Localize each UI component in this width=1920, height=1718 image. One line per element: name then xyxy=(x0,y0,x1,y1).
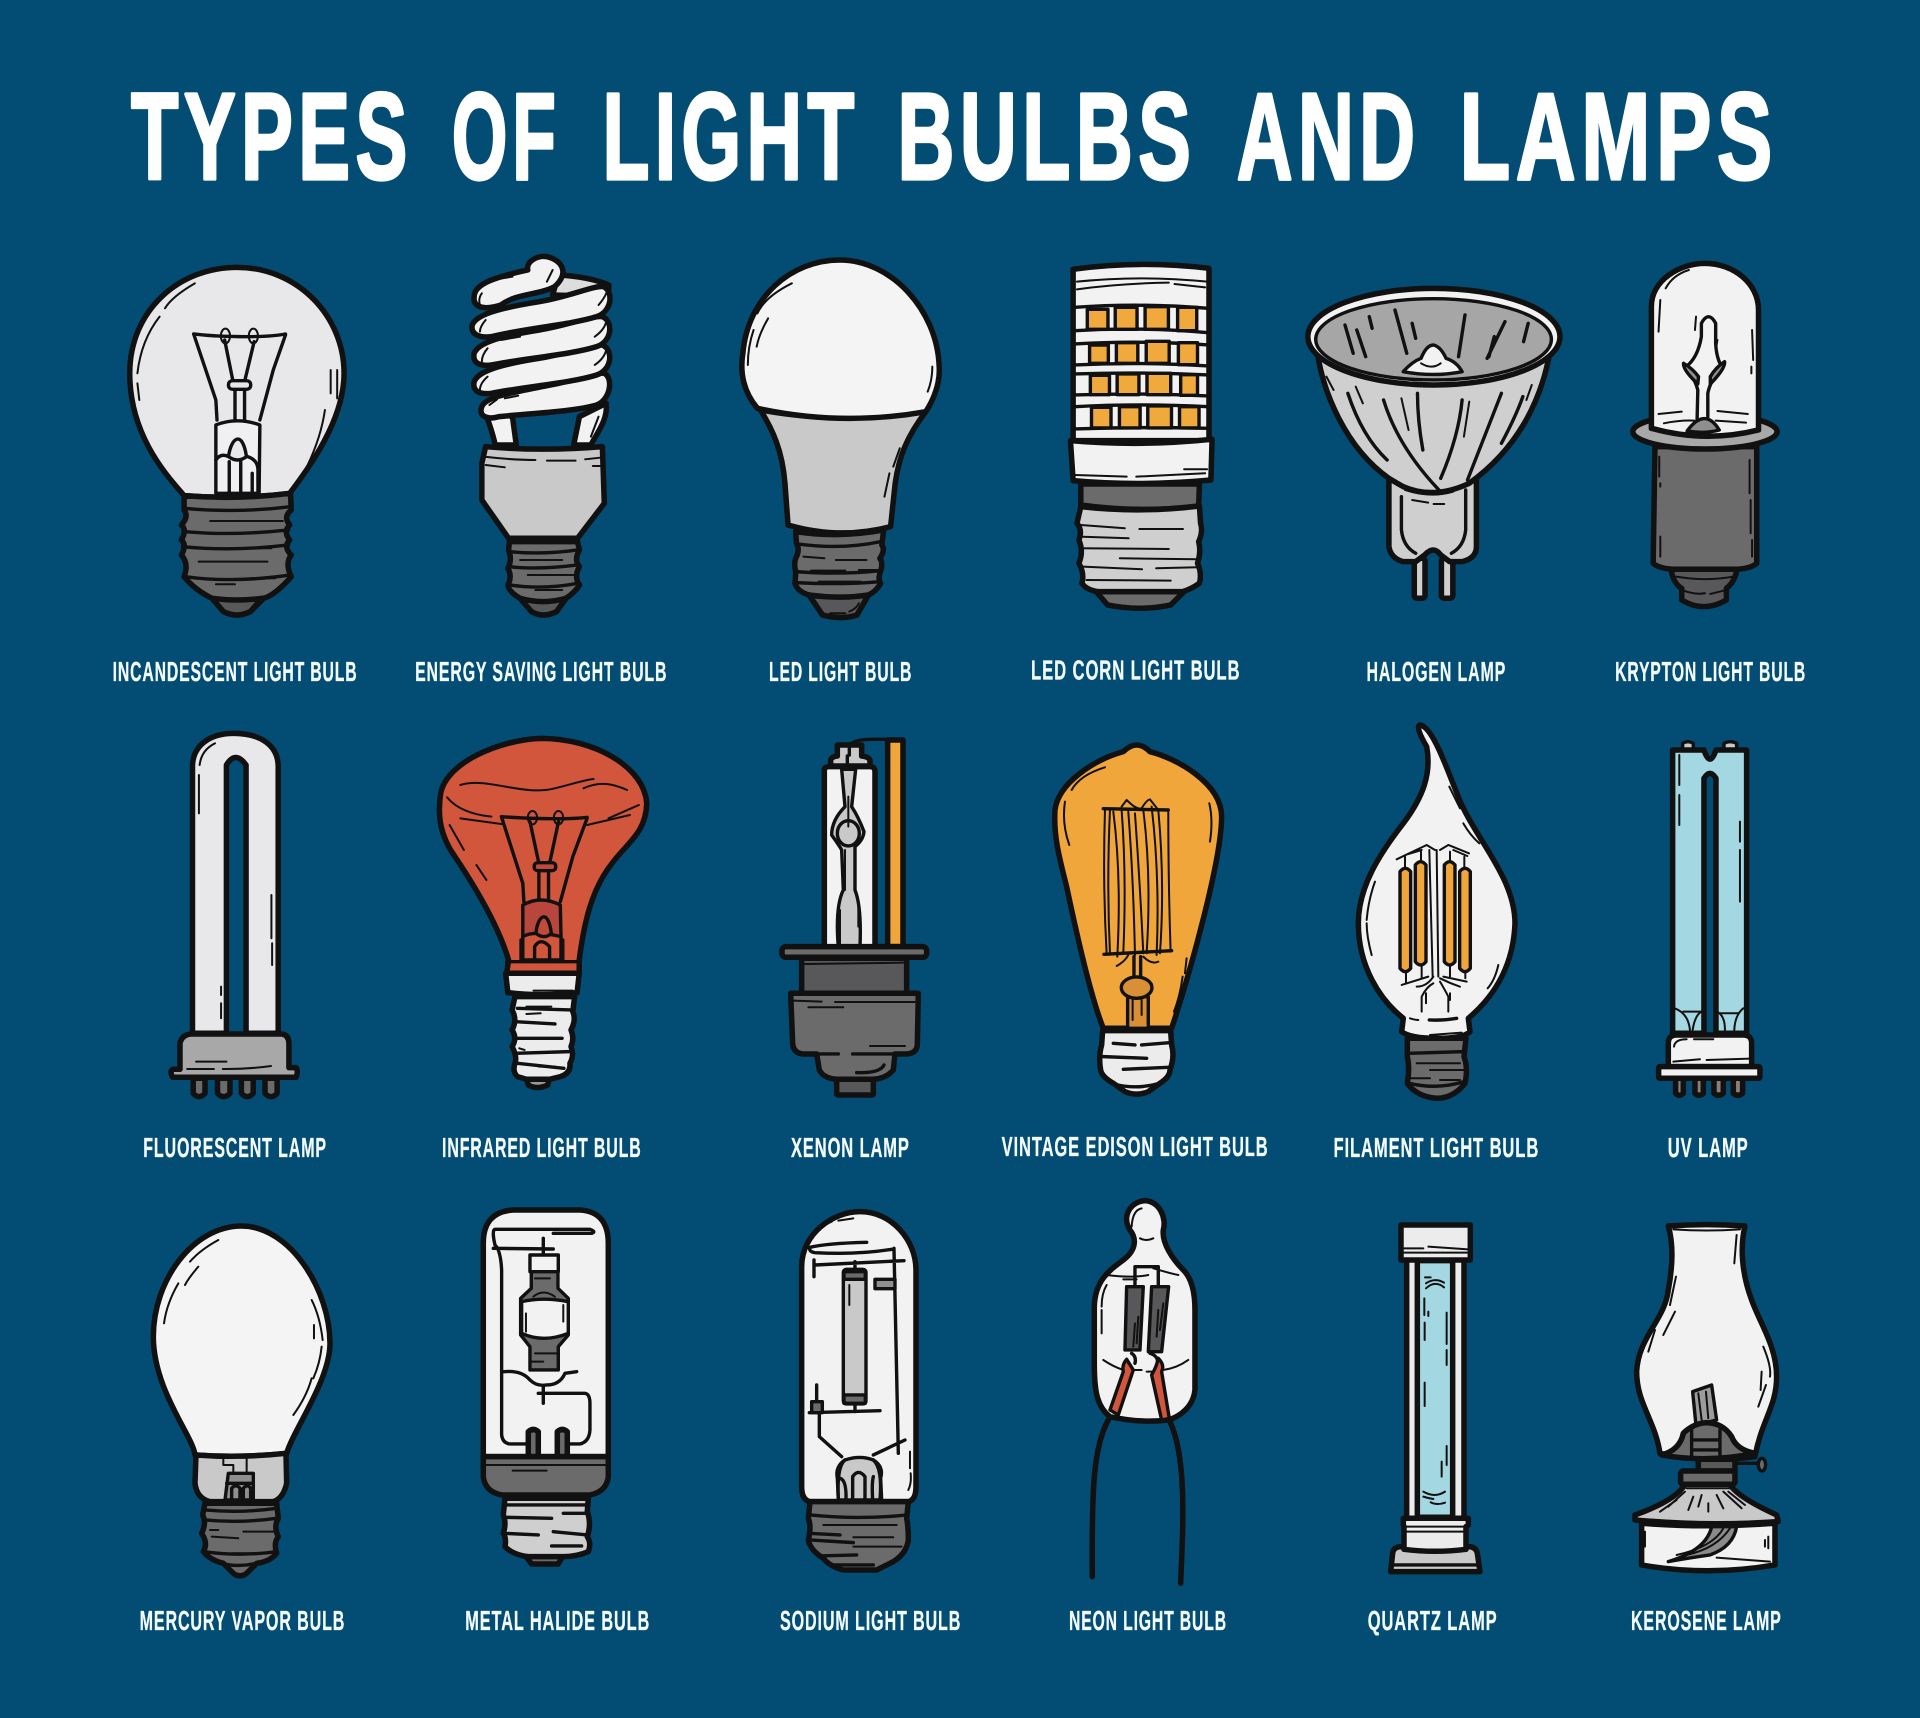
panel: quartz lamp xyxy=(1368,1225,1498,1636)
title: OF xyxy=(452,68,561,206)
panel: vintage Edison light bulb xyxy=(1002,745,1269,1162)
panel: infrared light bulb xyxy=(439,738,647,1163)
icon: xenon lamp xyxy=(782,739,927,1095)
icon: spiral bulb xyxy=(472,256,610,615)
panel: neon light bulb xyxy=(1069,1201,1227,1636)
label: LED LIGHT BULB xyxy=(769,656,912,687)
label: INFRARED LIGHT BULB xyxy=(442,1132,642,1163)
panel: mercury vapor bulb xyxy=(140,1226,345,1636)
title: AND xyxy=(1237,68,1420,206)
panel: incandescent light bulb xyxy=(113,267,358,687)
icon: krypton bulb xyxy=(1633,263,1777,607)
icon: infrared bulb xyxy=(439,738,647,1087)
title: TYPES xyxy=(131,68,413,206)
title xyxy=(131,68,1778,206)
panel: fluorescent lamp xyxy=(143,733,327,1163)
label: KEROSENE LAMP xyxy=(1631,1605,1782,1636)
panel: kerosene lamp xyxy=(1631,1225,1782,1636)
label: METAL HALIDE BULB xyxy=(465,1605,650,1636)
label: HALOGEN LAMP xyxy=(1367,656,1506,687)
icon: mercury bulb xyxy=(153,1226,330,1576)
panel: LED light bulb xyxy=(742,260,939,687)
icon: sodium bulb xyxy=(802,1212,916,1570)
icon: Edison bulb xyxy=(1055,745,1222,1094)
icon: metal halide bulb xyxy=(483,1210,608,1564)
icon: fluorescent lamp xyxy=(171,733,297,1097)
label: ENERGY SAVING LIGHT BULB xyxy=(415,656,667,687)
title: LIGHT xyxy=(602,68,860,206)
label: SODIUM LIGHT BULB xyxy=(780,1605,961,1636)
panel: filament light bulb xyxy=(1333,725,1539,1163)
icon: flame filament bulb xyxy=(1358,725,1515,1098)
icon: quartz lamp xyxy=(1391,1225,1480,1572)
label: XENON LAMP xyxy=(791,1132,910,1163)
label: QUARTZ LAMP xyxy=(1368,1605,1498,1636)
title: BULBS xyxy=(898,68,1196,206)
panel: krypton light bulb xyxy=(1615,263,1806,687)
label: FLUORESCENT LAMP xyxy=(143,1132,327,1163)
label: FILAMENT LIGHT BULB xyxy=(1333,1132,1539,1163)
icon: halogen lamp xyxy=(1308,288,1560,598)
label: UV LAMP xyxy=(1668,1132,1749,1163)
icon: kerosene lamp xyxy=(1635,1225,1778,1571)
label: INCANDESCENT LIGHT BULB xyxy=(113,656,358,687)
panel: sodium light bulb xyxy=(780,1212,961,1636)
label: NEON LIGHT BULB xyxy=(1069,1605,1227,1636)
label: VINTAGE EDISON LIGHT BULB xyxy=(1002,1131,1269,1162)
panel: UV lamp xyxy=(1659,742,1760,1163)
label: MERCURY VAPOR BULB xyxy=(140,1605,345,1636)
icon: neon bulb xyxy=(1092,1201,1195,1583)
icon: LED bulb xyxy=(742,260,939,617)
panel: metal halide bulb xyxy=(465,1210,650,1636)
icon: UV lamp xyxy=(1659,742,1760,1095)
panel: halogen lamp xyxy=(1308,288,1560,687)
panel: LED corn light bulb xyxy=(1031,264,1240,686)
panel: xenon lamp xyxy=(782,739,927,1163)
panel: energy saving light bulb xyxy=(415,256,667,687)
label: LED CORN LIGHT BULB xyxy=(1031,655,1240,686)
icon: LED corn bulb xyxy=(1070,264,1212,608)
icon: incandescent bulb xyxy=(130,267,344,615)
